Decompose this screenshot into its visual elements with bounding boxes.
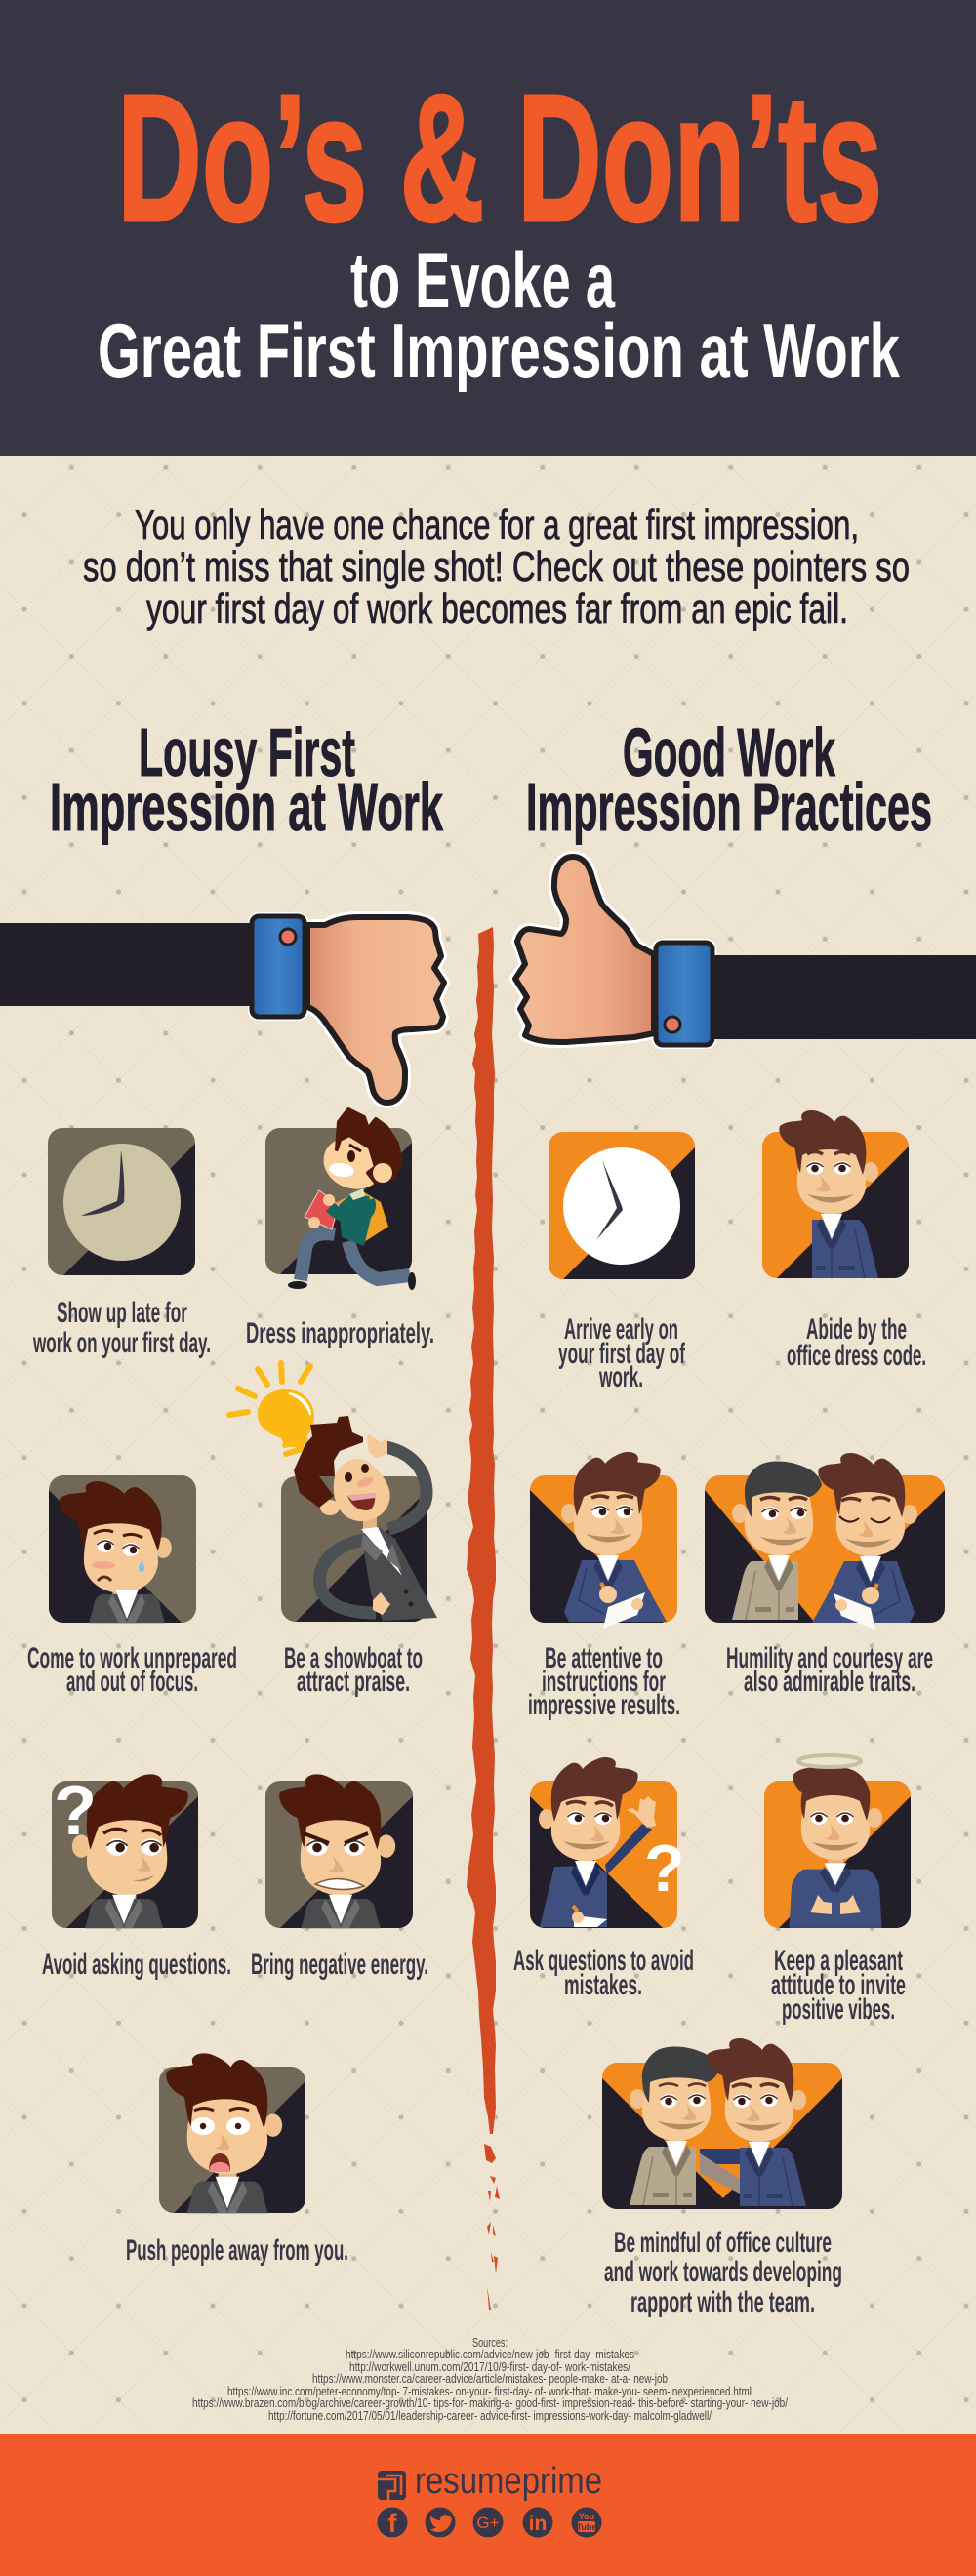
intro paragraph xyxy=(83,502,910,631)
item: dress inappropriately xyxy=(246,1109,434,1349)
sources list: http://fortune.com/2017/05/01/leadership-career- advice-first- impressions-work-day- malcolm-gladwell/ xyxy=(268,2409,712,2423)
card xyxy=(159,2067,305,2213)
card xyxy=(705,1475,945,1623)
sources list: https://www.brazen.com/blog/archive/career-growth/10- tips-for- making-a- good-first- impression-read- this-before- starting-your- new-job/ xyxy=(192,2396,788,2410)
sources list: http://workwell.unum.com/2017/10/9-first- day-of- work-mistakes/ xyxy=(349,2360,630,2374)
item: arrive early xyxy=(549,1132,695,1393)
character: man with halo xyxy=(789,1755,882,1928)
icon: google plus xyxy=(472,2508,504,2537)
card xyxy=(281,1476,427,1622)
item: be attentive: instructions for xyxy=(542,1666,666,1698)
item: push people away xyxy=(126,2053,348,2267)
icon: google plus: G+ xyxy=(476,2514,500,2532)
icon: youtube: Tube xyxy=(577,2522,596,2532)
icon: facebook: f xyxy=(388,2509,398,2538)
character: two colleagues xyxy=(630,2038,806,2206)
heading: good work impression xyxy=(526,714,932,845)
card xyxy=(530,1781,677,1928)
item: arrive early: your first day of xyxy=(558,1338,686,1370)
character: worried man with tear xyxy=(60,1481,172,1623)
sources list xyxy=(192,2336,788,2423)
icon: linkedin: in xyxy=(529,2513,547,2535)
item: office culture xyxy=(602,2038,842,2318)
item: dress code xyxy=(762,1110,926,1372)
thumbs up arm xyxy=(515,857,976,1049)
item: ask questions: mistakes. xyxy=(564,1969,642,2001)
icon: youtube xyxy=(572,2508,601,2537)
item: be attentive xyxy=(528,1452,680,1721)
subtitle line one: to Evoke a xyxy=(350,237,616,325)
caption: Be a showboat to xyxy=(284,1642,423,1674)
item: avoid asking questions xyxy=(42,1772,231,1981)
caption: Push people away from you. xyxy=(126,2234,348,2267)
item: pleasant attitude xyxy=(764,1755,911,2026)
icon: facebook xyxy=(377,2508,408,2538)
sources list: https://www.monster.ca/career-advice/article/mistakes- people-make- at-a- new-job xyxy=(312,2372,668,2386)
character: man taking notes xyxy=(561,1452,667,1629)
item: showboat xyxy=(229,1363,437,1698)
icon: twitter xyxy=(426,2508,455,2537)
item: unprepared: and out of focus. xyxy=(66,1666,198,1698)
card xyxy=(764,1781,911,1928)
character: man with closed eyes xyxy=(812,1453,917,1630)
caption: Bring negative energy. xyxy=(251,1949,428,1981)
character: showboating man xyxy=(294,1416,437,1621)
sources list: Sources: xyxy=(472,2336,508,2350)
card xyxy=(52,1781,198,1928)
character: running student xyxy=(288,1109,416,1290)
caption: Come to work unprepared xyxy=(27,1642,237,1674)
icon: question mark: ? xyxy=(644,1831,685,1906)
item: negative energy xyxy=(251,1774,428,1981)
card xyxy=(49,1475,196,1623)
icon: question mark: ? xyxy=(54,1772,97,1850)
logo icon xyxy=(378,2471,406,2500)
card xyxy=(265,1128,412,1274)
icon: linkedin xyxy=(523,2508,552,2537)
heading: lousy first impression: Impression at Work xyxy=(50,769,443,845)
caption: Show up late for xyxy=(57,1297,187,1329)
sources list: https://www.inc.com/peter-economy/top- 7-mistakes- on-your- first-day- of- work-that- make-you- seem-inexperienced.html xyxy=(227,2385,752,2398)
icon: white clock xyxy=(549,1132,695,1279)
caption: Avoid asking questions. xyxy=(42,1949,231,1981)
icon: youtube: You xyxy=(579,2512,594,2521)
card xyxy=(602,2063,842,2209)
red brush divider xyxy=(467,927,500,2310)
item: be attentive: impressive results. xyxy=(528,1689,680,1721)
header panel xyxy=(0,0,976,456)
thumbs down arm xyxy=(0,912,444,1103)
footer panel xyxy=(0,2434,976,2576)
character: man with question mark xyxy=(72,1774,188,1928)
caption: Arrive early on xyxy=(564,1313,678,1346)
caption: Dress inappropriately. xyxy=(246,1317,434,1349)
item: showboat: attract praise. xyxy=(297,1666,410,1698)
logo wordmark: resumeprime xyxy=(415,2461,602,2502)
card xyxy=(265,1781,413,1928)
character: man in beige suit xyxy=(732,1461,822,1620)
card xyxy=(530,1475,677,1623)
item: office culture: rapport with the team. xyxy=(630,2286,815,2318)
sources list: https://www.siliconrepublic.com/advice/new-job- first-day- mistakes xyxy=(346,2348,634,2361)
caption: Be attentive to xyxy=(545,1642,663,1674)
character: shocked man xyxy=(166,2053,282,2213)
item: show up late: work on your first day. xyxy=(32,1327,211,1359)
item: humility xyxy=(705,1453,945,1698)
character: smiling man in suit xyxy=(779,1110,878,1278)
icon: grey clock xyxy=(48,1128,195,1275)
cream patterned background xyxy=(0,456,976,2436)
character: angry man xyxy=(279,1774,395,1928)
icon: light bulb xyxy=(229,1363,314,1454)
character: man raising hand xyxy=(539,1757,656,1927)
heading: lousy first impression: Lousy First xyxy=(139,714,355,790)
item: ask questions xyxy=(513,1757,694,2001)
item: show up late xyxy=(32,1128,211,1359)
item: arrive early: work. xyxy=(598,1361,643,1393)
item: unprepared xyxy=(27,1475,237,1698)
heading: lousy first impression xyxy=(50,714,443,845)
caption: Ask questions to avoid xyxy=(513,1945,694,1977)
card xyxy=(762,1132,909,1278)
